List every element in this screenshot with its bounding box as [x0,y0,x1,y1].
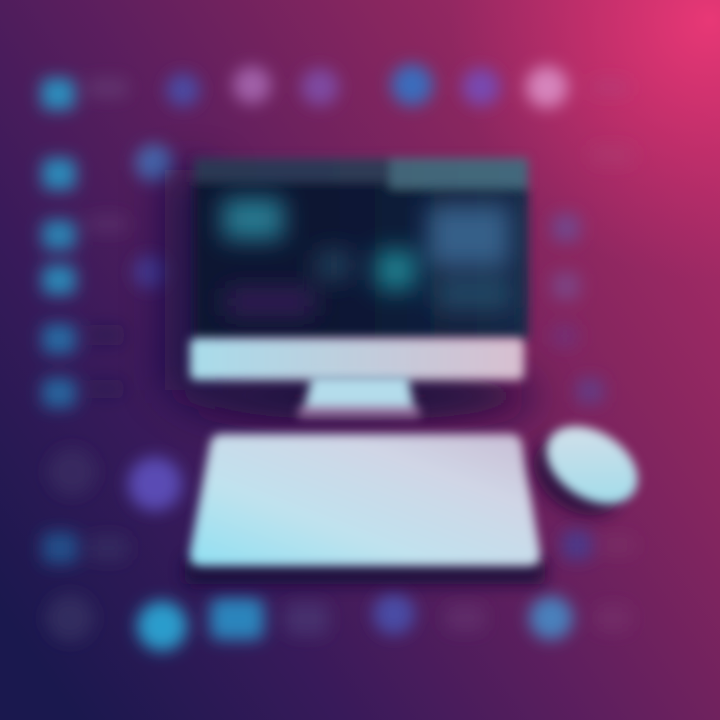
keyboard [190,434,540,566]
monitor chin [190,338,524,380]
left column of icons [42,144,173,408]
mouse [532,410,652,520]
top row of icons [41,64,630,110]
screen content [222,198,512,316]
right column of icons [552,145,636,560]
bottom row of icons [46,593,631,651]
monitor screen [194,158,528,340]
monitor shadow [165,170,535,420]
mouse shadow [519,421,637,531]
keyboard shadow [185,558,545,584]
lower left icons [42,448,182,564]
monitor [190,158,528,418]
monitor stand [298,376,420,418]
